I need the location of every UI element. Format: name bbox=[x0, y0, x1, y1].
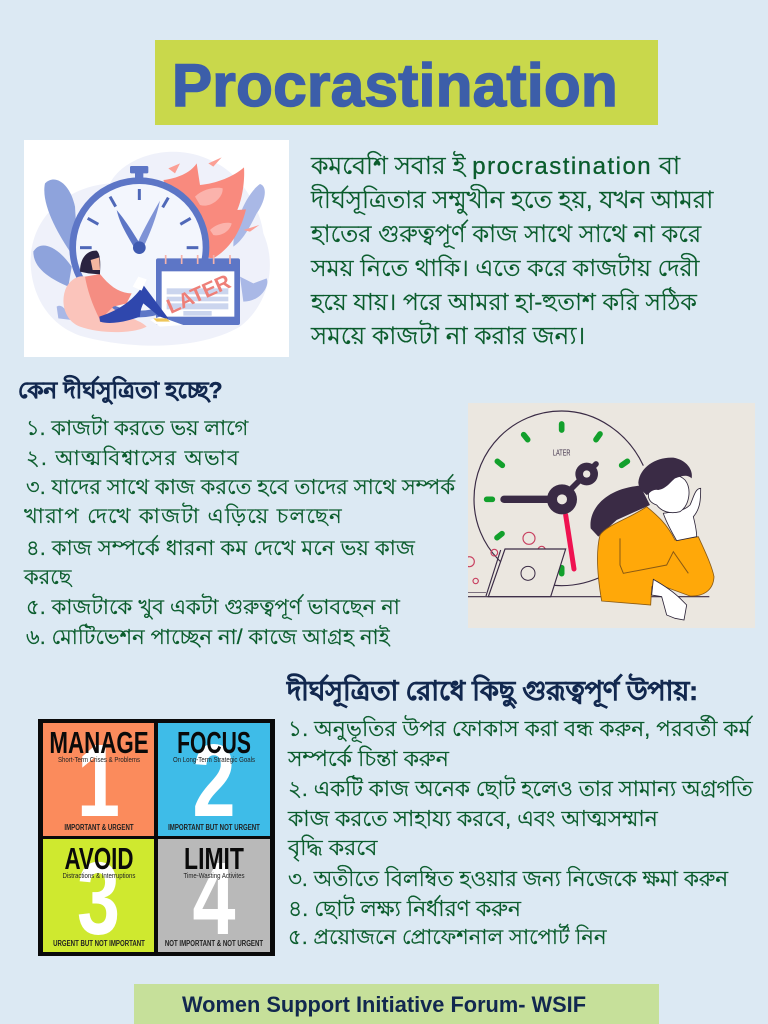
laptop bbox=[488, 549, 566, 597]
illustration: woman at desk with clock: LATER bbox=[553, 450, 570, 458]
intro paragraph: সময়ে কাজটা না করার জন্য। bbox=[311, 323, 585, 350]
lower hand bbox=[652, 579, 687, 620]
quadrant: limit bbox=[158, 839, 270, 952]
quadrant: focus bbox=[158, 723, 270, 836]
list: reasons: ৫. কাজটাকে খুব একটা গুরুত্বপূর্ণ ভাবছেন না bbox=[26, 596, 400, 619]
quadrant: focus: On Long-Term Strategic Goals bbox=[173, 755, 255, 764]
list: reasons bbox=[24, 414, 456, 649]
list: prevention tips: ৫. প্রয়োজনে প্রোফেশনাল সাপোর্ট নিন bbox=[288, 926, 607, 949]
list: prevention tips: সম্পর্কে চিন্তা করুন bbox=[288, 746, 449, 771]
quadrant: manage bbox=[43, 723, 154, 836]
quadrant: avoid: Distractions & Interruptions bbox=[62, 871, 135, 880]
quadrant: focus: FOCUS bbox=[177, 725, 251, 760]
later stamp: LATER bbox=[163, 270, 234, 319]
flame bbox=[163, 163, 246, 258]
quadrant: manage: MANAGE bbox=[49, 725, 148, 760]
quadrant: limit: Time-Wasting Activites bbox=[183, 871, 244, 880]
list: prevention tips: ৩. অতীতে বিলম্বিত হওয়ার জন্য নিজেকে ক্ষমা করুন bbox=[288, 867, 728, 891]
illustration: clock, calendar and woman with laptop bbox=[24, 140, 289, 357]
intro paragraph: হয়ে যায়। পরে আমরা হা-হুতাশ করি সঠিক bbox=[311, 290, 697, 316]
footer banner bbox=[134, 984, 659, 1024]
quadrant: avoid bbox=[43, 839, 154, 952]
intro paragraph bbox=[310, 150, 714, 350]
heading: prevention tips: দীর্ঘসূত্রিতা রোধে কিছু গুরূত্বপূর্ণ উপায়: bbox=[287, 676, 698, 706]
list: reasons: ২. আত্মবিশ্বাসের অভাব bbox=[26, 447, 240, 470]
intro paragraph: কমবেশি সবার ই procrastination বা bbox=[311, 153, 680, 180]
intro paragraph: দীর্ঘসূত্রিতার সম্মুখীন হতে হয়, যখন আমরা bbox=[311, 187, 713, 214]
clock hands bbox=[504, 488, 548, 510]
quadrant: manage: 1 bbox=[77, 723, 120, 836]
calendar bbox=[156, 258, 240, 325]
list: prevention tips: ১. অনুভূতির উপর ফোকাস করা বন্ধ করুন, পরবর্তী কর্ম bbox=[288, 716, 751, 741]
intro paragraph: হাতের গুরুত্বপূর্ণ কাজ সাথে সাথে না করে bbox=[311, 221, 701, 248]
list: reasons: ১. কাজটা করতে ভয় লাগে bbox=[26, 417, 248, 440]
list: reasons: ৪. কাজ সম্পর্কে ধারনা কম দেখে মনে ভয় কাজ bbox=[26, 537, 415, 560]
quadrant: manage: IMPORTANT & URGENT bbox=[64, 823, 133, 832]
list: reasons: ৬. মোটিভেশন পাচ্ছেন না/ কাজে আগ্রহ নাই bbox=[26, 626, 390, 649]
woman bbox=[63, 276, 147, 332]
quadrant: avoid: URGENT BUT NOT IMPORTANT bbox=[53, 939, 144, 948]
floating circles bbox=[464, 532, 545, 584]
list: reasons: খারাপ দেখে কাজটা এড়িয়ে চলছেন bbox=[24, 505, 343, 528]
list: prevention tips: ২. একটি কাজ অনেক ছোট হলেও তার সামান্য অগ্রগতি bbox=[288, 777, 753, 801]
heading: why procrastination happens: কেন দীর্ঘসুত্রিতা হচ্ছে? bbox=[18, 377, 223, 403]
quadrant: focus: 2 bbox=[193, 723, 235, 836]
background blob bbox=[31, 152, 270, 346]
hair top bbox=[638, 458, 692, 495]
title text: Procrastination bbox=[172, 52, 618, 119]
footer text: Women Support Initiative Forum- WSIF bbox=[182, 992, 586, 1017]
arm and hand bbox=[663, 488, 701, 541]
quadrant: avoid: AVOID bbox=[64, 841, 133, 876]
list: prevention tips: বৃদ্ধি করবে bbox=[288, 835, 377, 860]
matrix: four quadrants bbox=[38, 719, 275, 956]
list: reasons: করছে bbox=[24, 566, 71, 589]
list: prevention tips bbox=[288, 714, 754, 949]
list: prevention tips: কাজ করতে সাহায্য করবে, এবং আত্মসম্মান bbox=[288, 806, 658, 831]
illustration: woman at desk with clock bbox=[468, 403, 755, 628]
clock outline bbox=[474, 411, 643, 586]
clock ticks bbox=[487, 424, 627, 574]
quadrant: limit: NOT IMPORTANT & NOT URGENT bbox=[165, 939, 263, 948]
face bbox=[648, 475, 689, 513]
orange sweater bbox=[597, 507, 714, 605]
quadrant: manage: Short-Term Crises & Problems bbox=[57, 755, 140, 764]
title banner bbox=[155, 40, 658, 125]
quadrant: focus: IMPORTANT BUT NOT URGENT bbox=[168, 823, 260, 832]
long hair bbox=[590, 486, 650, 537]
clock bbox=[73, 181, 206, 314]
list: reasons: ৩. যাদের সাথে কাজ করতে হবে তাদের সাথে সম্পর্ক bbox=[26, 476, 455, 499]
intro paragraph: সময় নিতে থাকি। এতে করে কাজটায় দেরী bbox=[311, 256, 699, 282]
list: prevention tips: ৪. ছোট লক্ষ্য নির্ধারণ করুন bbox=[288, 896, 521, 921]
quadrant: limit: LIMIT bbox=[184, 841, 244, 876]
